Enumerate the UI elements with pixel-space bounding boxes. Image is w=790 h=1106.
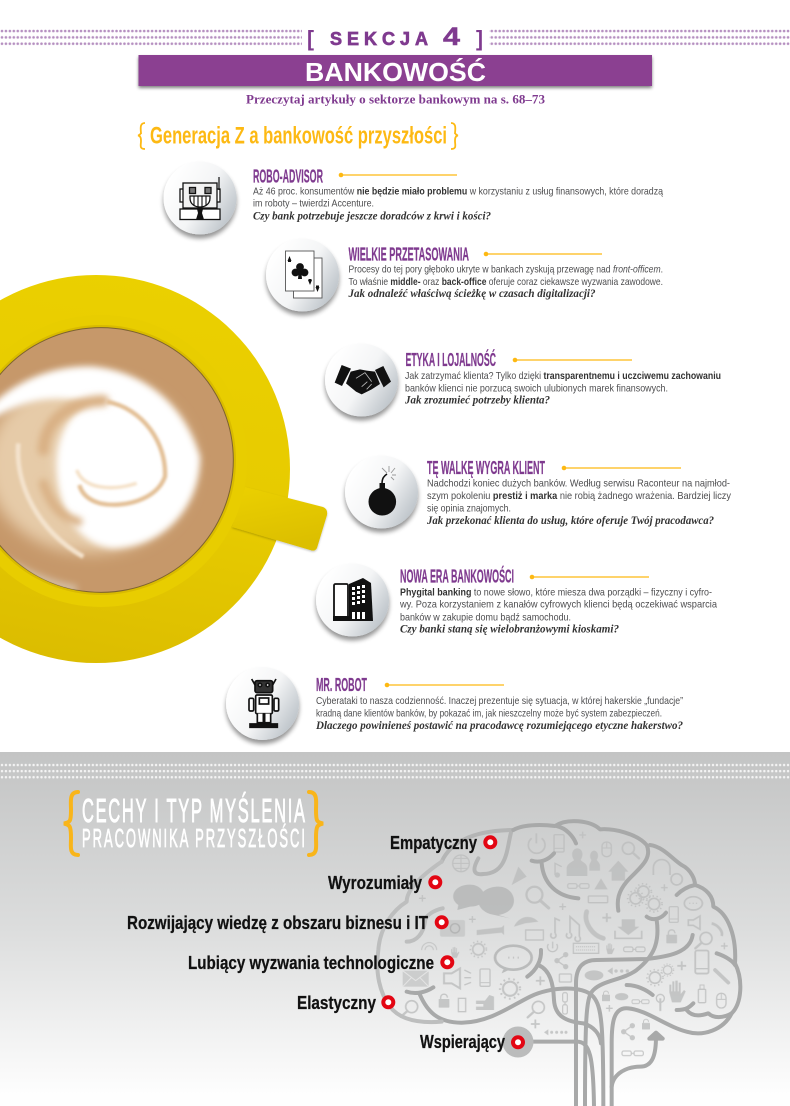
connector — [339, 173, 457, 177]
panel: traits of the future employee — [0, 752, 790, 1106]
icon: robot head — [164, 162, 236, 234]
cup handle — [232, 487, 327, 551]
item 5: Nowa era bankowości — [316, 564, 717, 636]
text: Czy bank potrzebuje jeszcze doradców z krwi i kości? — [253, 210, 491, 222]
subtitle: Przeczytaj artykuły o sektorze bankowym na s. 68–73 — [246, 92, 546, 106]
text: Jak zatrzymać klienta? Tylko dzięki transparentnemu i uczciwemu zachowaniu — [405, 371, 721, 382]
item 4: Tę walkę wygra klient — [345, 456, 732, 528]
title bar — [138, 55, 652, 87]
text: Procesy do tej pory głęboko ukryte w bankach zyskują przewagę nad front-officem. — [348, 264, 663, 276]
text: banków klienci nie porzucą swoich ulubionych marek finansowych. — [405, 384, 668, 394]
icon: bomb — [345, 456, 418, 528]
text — [404, 371, 721, 407]
trait: Empatyczny: Empatyczny — [390, 833, 477, 853]
text: kradną dane klientów banków, by pokazać im, jak nieszczelny może być system zabezpieczeń. — [316, 709, 662, 720]
connector — [484, 252, 602, 256]
text: To właśnie middle- oraz back-office oferuje coraz ciekawsze wyzwania zawodowe. — [348, 277, 663, 288]
icon: handshake — [325, 344, 398, 416]
section dotted band — [0, 28, 790, 47]
text: Nadchodzi koniec dużych banków. Według serwisu Raconteur na najmłod- — [427, 479, 730, 490]
brain icons — [401, 832, 728, 1056]
item 2: Wielkie przetasowania — [266, 238, 663, 312]
icon: robot figure — [226, 667, 299, 740]
text: szym pokoleniu prestiż i marka nie robią żadnego wrażenia. Bardziej liczy — [427, 491, 732, 502]
text — [426, 479, 732, 527]
text: Phygital banking to nowe słowo, które miesza dwa porządki – fizyczny i cyfro- — [400, 588, 712, 599]
item 1: Robo-advisor — [164, 162, 663, 234]
heading: Generacja Z: Generacja Z a bankowość przyszłości — [150, 122, 447, 150]
trait: Wyrozumiały: Wyrozumiały — [328, 873, 422, 893]
panel heading — [64, 792, 323, 855]
section label: SEKCJA — [330, 29, 428, 49]
illustration: coffee cup on yellow saucer — [0, 275, 327, 663]
trait: Lubiący wyzwania: Lubiący wyzwania technologiczne — [188, 953, 434, 973]
latte surface — [0, 328, 233, 592]
text — [253, 186, 663, 222]
text: im roboty – twierdzi Accenture. — [253, 198, 374, 210]
brain outline and circuit lines — [377, 821, 740, 1106]
item 4: Tę walkę wygra klient: TĘ WALKĘ WYGRA KLIENT — [427, 458, 545, 478]
connector — [530, 575, 649, 579]
text — [348, 264, 663, 300]
connector — [562, 466, 681, 470]
brain diagram — [377, 821, 740, 1106]
section label — [307, 23, 483, 51]
text: się opinia znajomych. — [427, 504, 511, 515]
text — [399, 588, 717, 636]
connector — [513, 358, 632, 362]
icon: playing cards — [266, 238, 339, 312]
text: Jak odnaleźć właściwą ścieżkę w czasach digitalizacji? — [348, 288, 596, 300]
text — [315, 696, 684, 732]
text: Aż 46 proc. konsumentów nie będzie miało problemu w korzystaniu z usług finansowych, które doradzą — [253, 186, 663, 198]
text: Jak przekonać klienta do usług, które oferuje Twój pracodawca? — [426, 515, 714, 527]
panel heading: CECHY I TYP MYŚLENIA — [82, 792, 305, 830]
item 6: Mr. Robot: MR. ROBOT — [316, 675, 367, 695]
text: Dlaczego powinieneś postawić na pracodawcę rozumiejącego etyczne hakerstwo? — [315, 720, 683, 732]
section label: ] — [476, 26, 483, 51]
trait: Wspierający — [420, 1026, 534, 1058]
title bar: BANKOWOŚĆ — [305, 57, 486, 87]
item 3: Etyka i lojalność — [325, 344, 721, 416]
item 6: Mr. Robot — [226, 667, 684, 740]
text: Czy banki staną się wielobranżowymi kioskami? — [400, 624, 619, 636]
saucer — [0, 275, 290, 663]
section label: [ — [307, 26, 315, 51]
trait: Wspierający: Wspierający — [420, 1032, 505, 1052]
panel heading: PRACOWNIKA PRZYSZŁOŚCI — [82, 823, 305, 853]
item 1: Robo-advisor: ROBO-ADVISOR — [253, 166, 323, 186]
item 3: Etyka i lojalność: ETYKA I LOJALNOŚĆ — [406, 349, 496, 370]
cup body — [0, 315, 247, 607]
heading: WIELKIE PRZETASOWANIA — [348, 244, 469, 264]
icon: phone and office building — [316, 564, 389, 636]
heading: Generacja Z — [138, 122, 458, 150]
trait: Rozwijający wiedzę: Rozwijający wiedzę z obszaru biznesu i IT — [127, 913, 428, 933]
section label: 4 — [443, 23, 460, 51]
connector — [385, 683, 504, 687]
text: wy. Poza korzystaniem z kanałów cyfrowych klienci będą oczekiwać wsparcia — [399, 600, 717, 611]
item 5: Nowa era bankowości: NOWA ERA BANKOWOŚCI — [400, 566, 514, 587]
text: banków w zakupie domu bądź samochodu. — [400, 613, 571, 624]
text: Jak zrozumieć potrzeby klienta? — [404, 395, 550, 407]
text: Cyberataki to nasza codzienność. Inaczej prezentuje się sytuacja, w której hakerskie „fundacje” — [316, 696, 684, 707]
trait: Elastyczny: Elastyczny — [297, 993, 376, 1013]
